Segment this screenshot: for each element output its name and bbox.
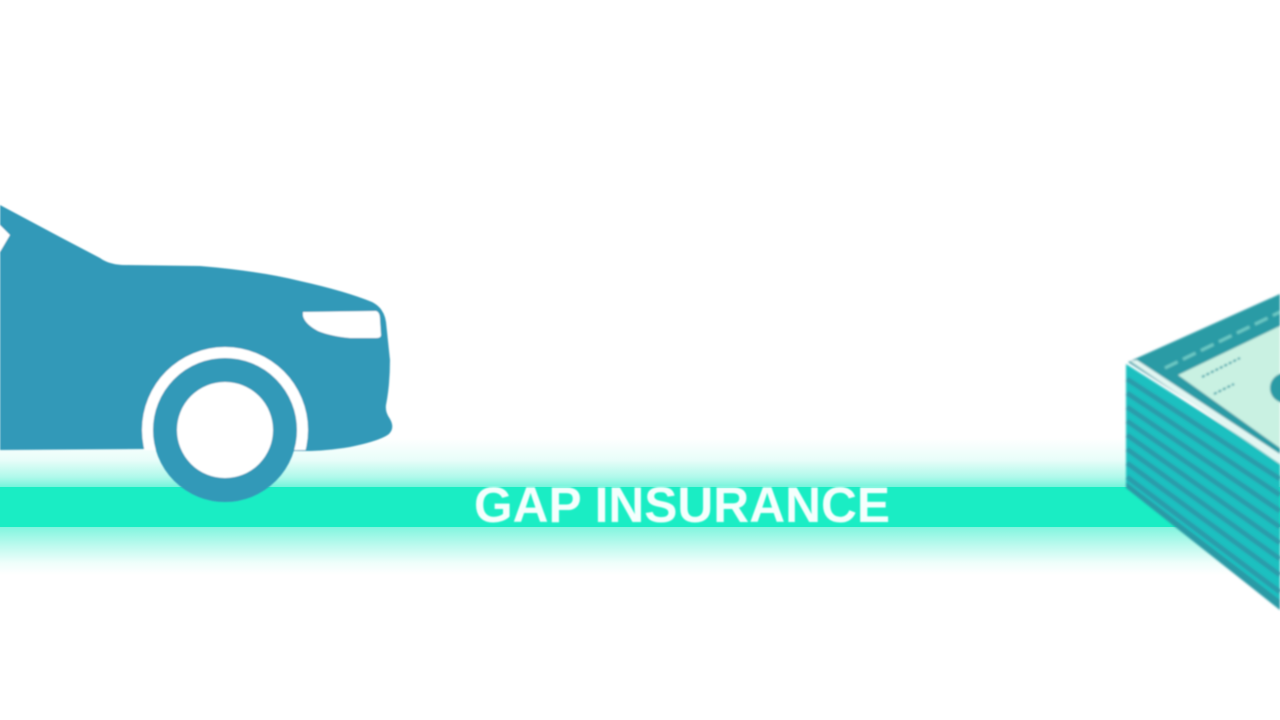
- white note edge: [1130, 360, 1280, 464]
- road band with glow: [0, 438, 1280, 575]
- heading: gap insurance: GAP INSURANCE: [474, 477, 890, 533]
- note edges: [1127, 379, 1280, 592]
- wheel: [165, 370, 285, 490]
- note border pattern: [1165, 312, 1280, 368]
- windshield: [0, 225, 10, 252]
- note portrait: [1270, 373, 1280, 403]
- top note inner: [1178, 326, 1280, 448]
- headlight: [303, 311, 381, 338]
- top note border: [1128, 294, 1280, 460]
- wheel arch: [140, 346, 310, 452]
- icon: car: [0, 205, 392, 513]
- stack side: [1126, 364, 1280, 610]
- icon: stack of money: [1126, 294, 1280, 610]
